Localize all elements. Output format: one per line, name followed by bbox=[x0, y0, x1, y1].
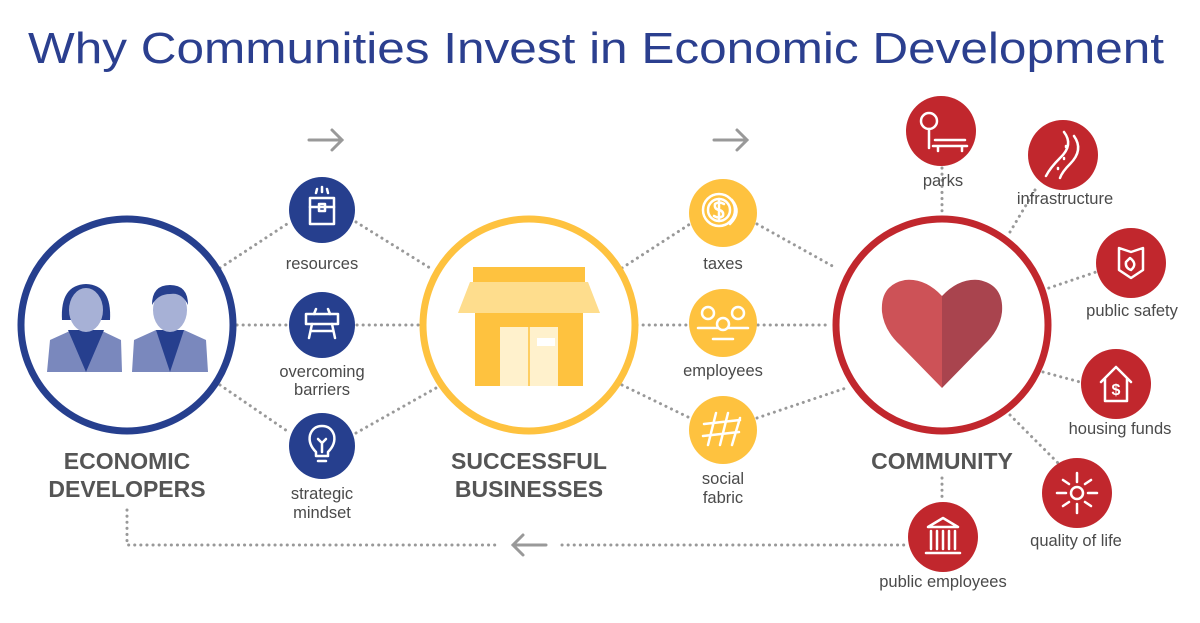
item: overcoming barriers bbox=[279, 292, 365, 399]
arrow: top left bbox=[309, 130, 342, 150]
label: ECONOMIC bbox=[64, 448, 190, 474]
item: infrastructure bbox=[1017, 120, 1113, 208]
icon: store bbox=[458, 267, 600, 386]
title: Why Communities Invest in Economic Development bbox=[28, 24, 1164, 73]
item: overcoming barriers: barriers bbox=[294, 381, 350, 399]
item: strategic mindset bbox=[289, 413, 355, 522]
item: resources: resources bbox=[286, 255, 358, 273]
item: quality of life bbox=[1030, 458, 1122, 550]
panel: economic developers: DEVELOPERS bbox=[48, 476, 206, 502]
panel: successful businesses: SUCCESSFUL bbox=[451, 448, 607, 474]
item: social fabric bbox=[689, 396, 757, 507]
item: parks bbox=[906, 96, 976, 190]
panel: community: COMMUNITY bbox=[871, 448, 1013, 474]
item: public employees: public employees bbox=[879, 573, 1007, 591]
item: overcoming barriers: overcoming bbox=[279, 363, 365, 381]
item: employees bbox=[683, 289, 763, 380]
item: housing funds: $ bbox=[1112, 382, 1121, 399]
item: employees: employees bbox=[683, 362, 763, 380]
panel: economic developers bbox=[21, 219, 233, 502]
item: strategic mindset: mindset bbox=[293, 504, 351, 522]
arrow: bottom back bbox=[513, 535, 546, 555]
item: resources bbox=[286, 177, 358, 273]
item: housing funds bbox=[1069, 349, 1171, 438]
panel: community bbox=[836, 219, 1048, 474]
item: public employees bbox=[879, 502, 1007, 591]
icon: heart bbox=[882, 280, 1002, 388]
item: parks: parks bbox=[923, 172, 963, 190]
item: social fabric: social bbox=[702, 470, 744, 488]
item: quality of life: quality of life bbox=[1030, 532, 1122, 550]
item: public safety: public safety bbox=[1086, 302, 1179, 320]
item: infrastructure: infrastructure bbox=[1017, 190, 1113, 208]
item: taxes bbox=[689, 179, 757, 273]
item: social fabric: fabric bbox=[703, 489, 743, 507]
arrow: top right bbox=[714, 130, 747, 150]
item: taxes: taxes bbox=[703, 255, 743, 273]
panel: successful businesses bbox=[423, 219, 635, 502]
connectors bbox=[127, 168, 1096, 545]
panel: successful businesses: BUSINESSES bbox=[455, 476, 603, 502]
item: public safety bbox=[1086, 228, 1179, 320]
icon: people bbox=[47, 284, 208, 372]
item: strategic mindset: strategic bbox=[291, 485, 353, 503]
item: housing funds: housing funds bbox=[1069, 420, 1171, 438]
